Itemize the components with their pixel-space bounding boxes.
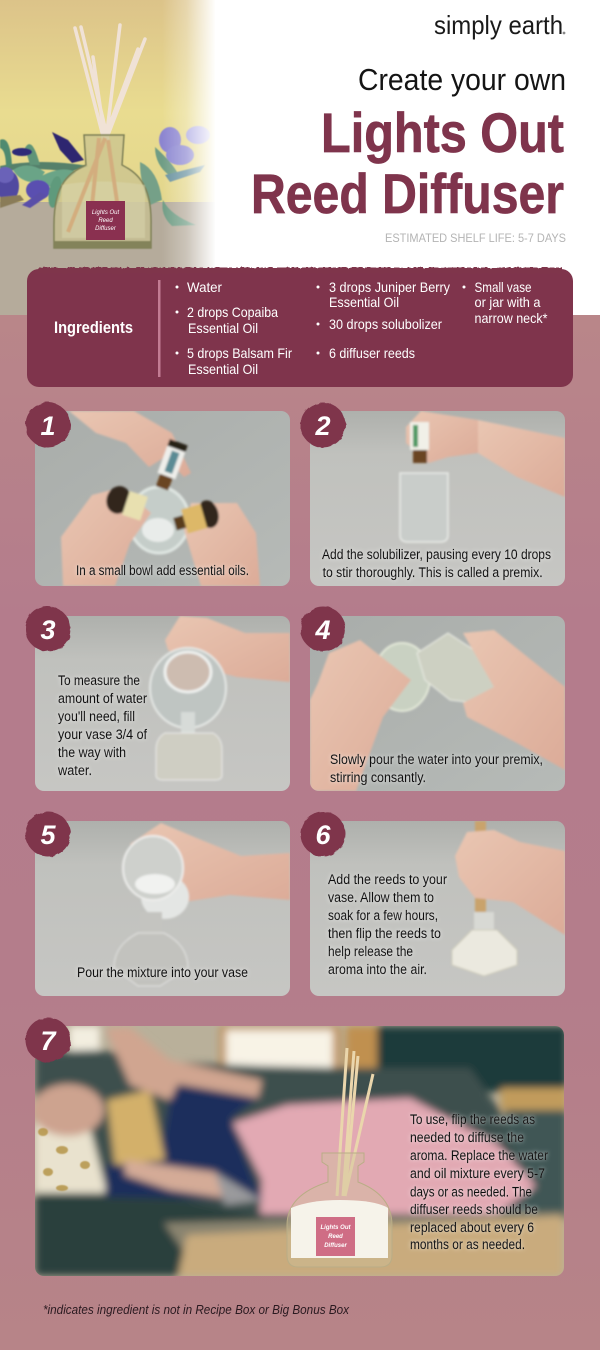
ingredient list column 1 <box>176 279 292 377</box>
photo: filling the vase <box>35 616 290 791</box>
ingredient list column 1: 2 drops Copaiba <box>187 304 278 320</box>
reeds <box>75 25 145 140</box>
step 6 instruction: Add the reeds to your <box>328 872 447 887</box>
ingredient list column 3: Small vase <box>474 279 532 295</box>
shelf life note: ESTIMATED SHELF LIFE: 5-7 DAYS <box>385 231 566 245</box>
panel: step 5 <box>35 821 290 996</box>
badge: step 5: 5 <box>40 820 56 850</box>
badge: step 4 <box>300 606 346 652</box>
ingredient list column 2: 30 drops solubolizer <box>329 316 442 332</box>
photo: adding reeds to vase <box>310 821 565 996</box>
vase with label <box>287 1153 392 1267</box>
step 7 instruction: and oil mixture every 5-7 <box>410 1166 545 1181</box>
step 3 instruction: your vase 3/4 of <box>58 727 147 742</box>
step 3 instruction: you'll need, fill <box>58 709 135 724</box>
ingredient list column 3: or jar with a <box>474 294 541 310</box>
ingredient list column 1: 5 drops Balsam Fir <box>187 345 292 361</box>
pillow dots <box>38 1128 90 1191</box>
step 6 instruction: then flip the reeds to <box>328 926 441 941</box>
step 7 instruction: To use, flip the reeds as <box>410 1112 535 1127</box>
lavender and leaves <box>0 126 210 226</box>
bottle label: Diffuser <box>95 226 117 232</box>
step 7 instruction: months or as needed. <box>410 1237 525 1252</box>
title: Create your own <box>358 62 566 97</box>
step 2 instruction <box>322 547 551 580</box>
ingredient list column 3 <box>462 279 548 326</box>
step 4 instruction <box>330 752 543 785</box>
step 7 instruction: replaced about every 6 <box>410 1220 534 1235</box>
panel: step 2 <box>310 411 565 586</box>
step 1 instruction: In a small bowl add essential oils. <box>76 563 249 578</box>
photo: dropper over beaker <box>310 411 565 586</box>
step 5 instruction: Pour the mixture into your vase <box>77 965 248 980</box>
step 6 instruction: aroma into the air. <box>328 962 427 977</box>
badge: step 3: 3 <box>40 615 56 645</box>
badge: step 6: 6 <box>315 820 331 850</box>
vase with label: Diffuser <box>324 1243 347 1249</box>
step 6 instruction <box>328 872 447 977</box>
step 4 instruction: stirring consantly. <box>330 770 426 785</box>
header photo: reed diffuser with lavender <box>0 0 235 315</box>
ingredient list column 1: Essential Oil <box>188 361 258 377</box>
footnote: *indicates ingredient is not in Recipe Box or Big Bonus Box <box>43 1303 350 1317</box>
step 7 instruction: needed to diffuse the <box>410 1130 524 1145</box>
photo: pouring water into premix <box>310 616 565 791</box>
vase with label: Lights Out <box>320 1225 351 1231</box>
title <box>251 62 566 225</box>
panel: step 6 <box>310 821 565 996</box>
ingredient list column 2: Essential Oil <box>329 294 399 310</box>
step 7 instruction: diffuser reeds should be <box>410 1202 538 1217</box>
badge: step 2: 2 <box>314 411 331 441</box>
bottle label <box>86 201 125 240</box>
heading: ingredients: Ingredients <box>54 319 133 337</box>
logo: simply earth: simply earth <box>434 10 563 40</box>
step 6 instruction: soak for a few hours, <box>328 908 438 923</box>
reeds <box>337 1048 373 1196</box>
badge: step 6 <box>300 812 346 856</box>
panel: step 1 <box>35 411 290 586</box>
ingredient list column 1: Essential Oil <box>188 320 258 336</box>
title: Lights Out <box>321 101 564 164</box>
photo: hands adding oils to bowl <box>35 411 290 586</box>
step 3 instruction: amount of water <box>58 691 147 706</box>
step 2 instruction: to stir thoroughly. This is called a premix. <box>323 565 543 580</box>
badge: step 1: 1 <box>40 411 56 441</box>
photo: woman resting on sofa with diffuser <box>32 1026 567 1276</box>
panel: step 7 <box>32 1026 567 1276</box>
ingredient list column 1: Water <box>187 279 222 295</box>
panel: step 4 <box>310 616 565 791</box>
bottle label: Lights Out <box>92 210 120 216</box>
step 4 instruction: Slowly pour the water into your premix, <box>330 752 543 767</box>
badge: step 5 <box>26 812 70 856</box>
step 3 instruction: water. <box>57 763 92 778</box>
badge: step 7 <box>26 1018 70 1062</box>
badge: step 2 <box>300 402 346 448</box>
step 6 instruction: help release the <box>328 944 413 959</box>
step 3 instruction: To measure the <box>58 673 140 688</box>
step 3 instruction: the way with <box>58 745 126 760</box>
ingredient list column 3: narrow neck* <box>474 310 548 326</box>
step 7 instruction <box>410 1112 548 1252</box>
step 7 instruction: aroma. Replace the water <box>410 1148 548 1163</box>
badge: step 3 <box>26 606 70 652</box>
panel: step 3 <box>35 616 290 791</box>
step 2 instruction: Add the solubilizer, pausing every 10 drops <box>322 547 551 562</box>
badge: step 4: 4 <box>314 615 331 645</box>
step 3 instruction <box>57 673 147 778</box>
glass bottle <box>54 135 151 248</box>
step 7 instruction: days or as needed. The <box>410 1184 532 1200</box>
photo: pouring mixture into vase <box>35 821 290 996</box>
step 6 instruction: vase. Allow them to <box>328 890 434 905</box>
bottle label: Reed <box>98 218 113 224</box>
ingredient list column 2 <box>316 279 450 361</box>
badge: step 1 <box>26 402 70 448</box>
badge: step 7: 7 <box>40 1026 57 1056</box>
ingredient list column 2: 3 drops Juniper Berry <box>329 279 450 295</box>
ingredient list column 2: 6 diffuser reeds <box>329 345 415 361</box>
panel: ingredients <box>27 268 573 387</box>
vase with label: Reed <box>328 1234 343 1240</box>
